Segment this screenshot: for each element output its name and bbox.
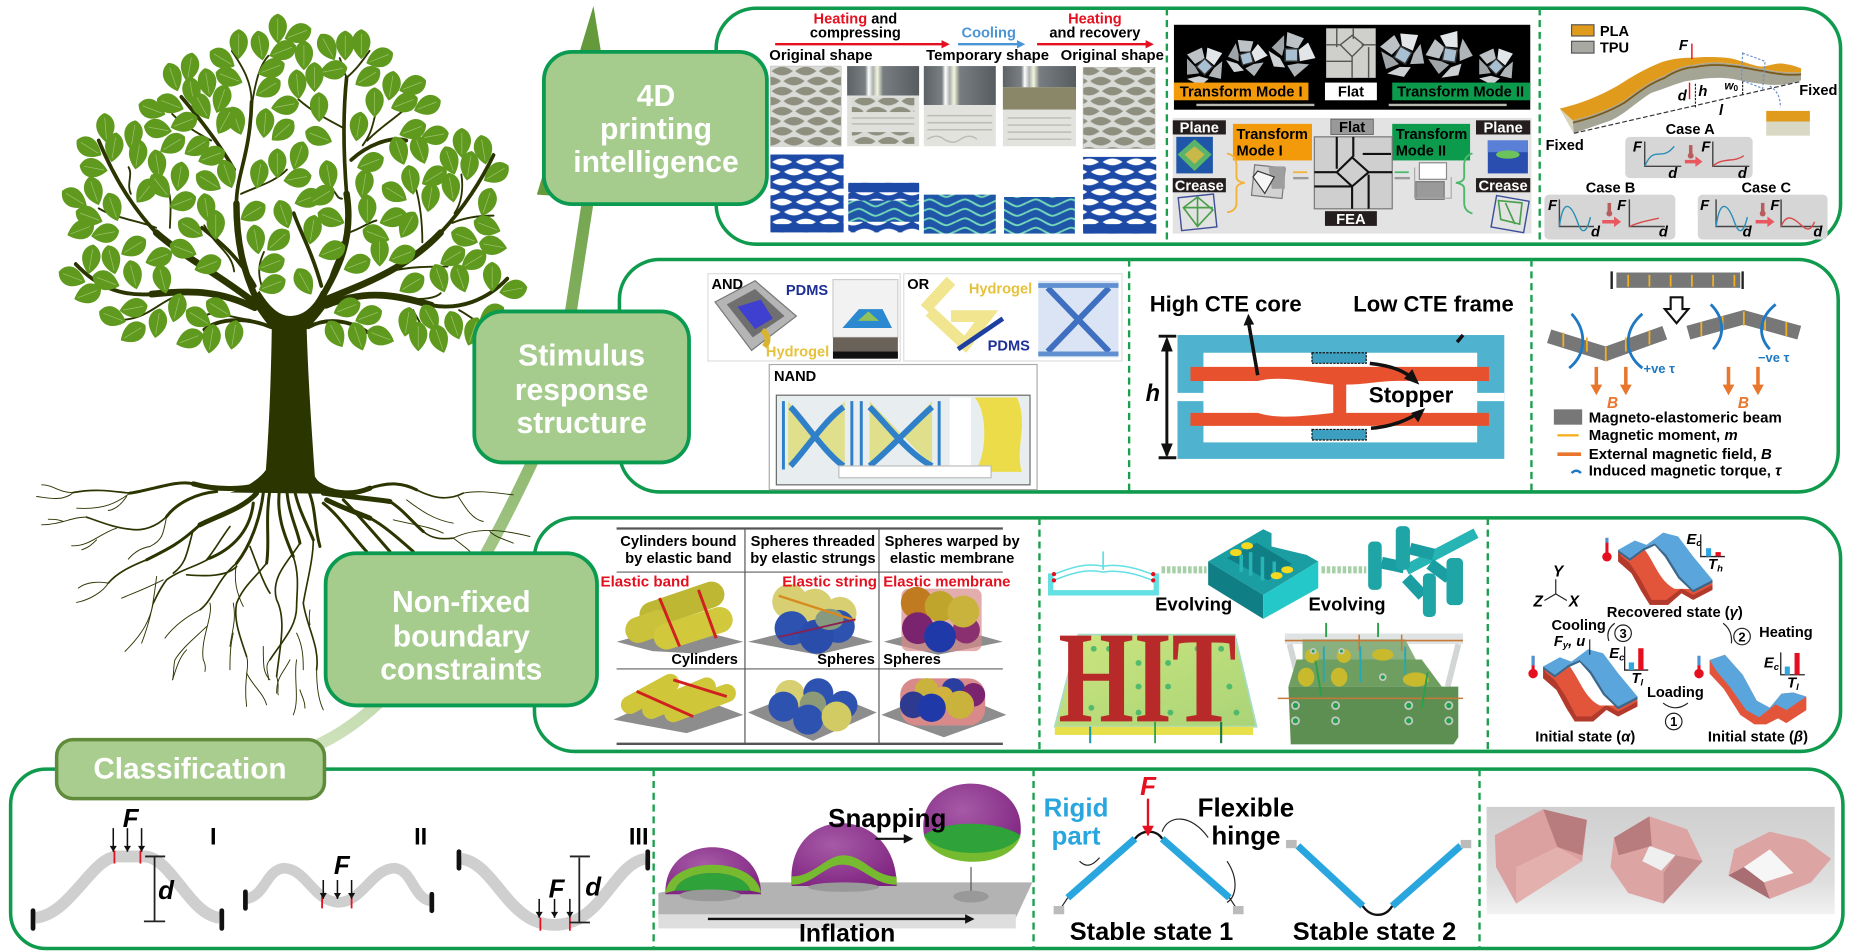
sub-panel: thermal bistable states: , u — [1567, 634, 1585, 650]
sub-panel: PLA TPU beam and force cases: w — [1724, 79, 1734, 92]
sub-panel: magneto-elastomeric beam: Induced magnetic torque, τ — [1589, 462, 1782, 479]
sub-panel: thermal bistable states: F — [1554, 634, 1563, 650]
sub-panel: magneto-elastomeric beam: Magnetic moment, m — [1589, 427, 1738, 444]
sub-panel: thermal bistable states: Initial state (α) — [1535, 730, 1635, 746]
sub-panel: rigid part and flexible hinge — [1044, 773, 1471, 946]
sub-panel: origami transform modes: Mode II — [1396, 144, 1446, 160]
sub-panel: heating and cooling lattice sequence: compressing — [810, 26, 901, 42]
sub-panel: rigid part and flexible hinge: Rigid — [1044, 794, 1108, 822]
sub-panel: AND OR NAND logic gates: Hydrogel — [766, 344, 829, 360]
category box: 4D printing intelligence — [544, 52, 767, 204]
sub-panel: AND OR NAND logic gates: Hydrogel — [969, 282, 1032, 298]
sub-panel: bistable beam types I II III: F — [549, 876, 566, 904]
sub-panel: magneto-elastomeric beam: Magneto-elastomeric beam — [1589, 409, 1782, 426]
sub-panel: bistable beam types I II III: I — [210, 824, 217, 850]
category box: stimulus response structure: Stimulus — [518, 340, 645, 373]
category box: classification — [57, 740, 324, 799]
sub-panel: PLA TPU beam and force cases: d — [1668, 166, 1678, 182]
sub-panel: thermal bistable states: Recovered state (γ) — [1607, 605, 1743, 621]
sub-panel: thermal bistable states: E — [1764, 656, 1774, 672]
sub-panel: origami transform modes — [1173, 25, 1531, 234]
sub-panel: thermal bistable states: c — [1619, 652, 1625, 663]
sub-panel: thermal bistable states: Cooling — [1551, 618, 1606, 634]
sub-panel: PLA TPU beam and force cases: d — [1738, 166, 1748, 182]
panel: 4D printing intelligence — [716, 8, 1841, 244]
growth arrow — [316, 6, 625, 746]
category box: non-fixed boundary constraints — [326, 553, 597, 705]
sub-panel: thermal bistable states: 3 — [1620, 626, 1627, 641]
sub-panel: PLA TPU beam and force cases: d — [1591, 225, 1601, 241]
sub-panel: origami transform modes: Plane — [1483, 121, 1523, 137]
tree roots — [37, 470, 530, 715]
sub-panel: pink origami structures — [1487, 807, 1835, 914]
sub-panel: PLA TPU beam and force cases: Fixed — [1546, 138, 1584, 154]
tree trunk and branches — [76, 51, 507, 477]
sub-panel: elastic bound table: Cylinders bound — [620, 534, 737, 550]
sub-panel: thermal bistable states — [1528, 532, 1813, 746]
sub-panel: PLA TPU beam and force cases: h — [1698, 84, 1707, 100]
sub-panel: elastic bound table: Cylinders — [671, 652, 738, 668]
sub-panel: origami transform modes: FEA — [1336, 212, 1366, 228]
sub-panel: AND OR NAND logic gates: NAND — [774, 369, 816, 385]
category box: stimulus response structure: response — [515, 374, 649, 407]
tree leaves — [56, 14, 529, 356]
category box: 4D printing intelligence: 4D — [637, 80, 675, 113]
sub-panel: PLA TPU beam and force cases: d — [1678, 88, 1688, 104]
sub-panel: origami transform modes: Transform Mode II — [1397, 85, 1524, 101]
sub-panel: thermal bistable states: l — [1796, 681, 1799, 692]
sub-panel: rigid part and flexible hinge: Flexible — [1198, 794, 1294, 822]
sub-panel: thermal bistable states: X — [1568, 593, 1580, 610]
sub-panel: PLA TPU beam and force cases: d — [1743, 225, 1753, 241]
sub-panel: elastic bound table: Elastic band — [601, 573, 689, 590]
sub-panel: elastic bound table: Elastic string — [782, 573, 877, 590]
panel: non-fixed boundary constraints — [534, 518, 1841, 751]
sub-panel: PLA TPU beam and force cases — [1544, 24, 1837, 241]
sub-panel: thermal bistable states: Z — [1532, 593, 1543, 610]
sub-panel: origami transform modes: Crease — [1479, 179, 1528, 195]
sub-panel: bistable beam types I II III: F — [123, 805, 140, 833]
sub-panel: elastic bound table: by elastic band — [625, 551, 732, 567]
sub-panel: thermal bistable states: h — [1717, 563, 1723, 574]
sub-panel: evolving HIT structure: Evolving — [1155, 593, 1232, 614]
sub-panel: PLA TPU beam and force cases: F — [1617, 198, 1627, 214]
category box: stimulus response structure — [474, 311, 689, 462]
sub-panel: AND OR NAND logic gates: AND — [711, 277, 743, 293]
sub-panel: thermal bistable states: Initial state (β) — [1708, 730, 1808, 746]
sub-panel: elastic bound table: Elastic membrane — [883, 574, 1010, 590]
sub-panel: thermal bistable states: c — [1696, 537, 1702, 548]
sub-panel: thermal bistable states: c — [1774, 661, 1780, 672]
tree crown — [56, 14, 529, 477]
sub-panel: PLA TPU beam and force cases: PLA — [1600, 24, 1630, 40]
sub-panel: elastic bound table: Spheres — [883, 652, 941, 668]
sub-panel: PLA TPU beam and force cases: d — [1659, 225, 1669, 241]
sub-panel: CTE core and frame: Low CTE frame — [1353, 291, 1514, 316]
sub-panel: evolving HIT structure — [1051, 526, 1476, 750]
sub-panel: PLA TPU beam and force cases: d — [1813, 225, 1823, 241]
sub-panel: thermal bistable states: 1 — [1670, 714, 1677, 729]
sub-panel: elastic bound table: elastic membrane — [890, 551, 1014, 567]
sub-panel: bistable beam types I II III: d — [585, 873, 602, 901]
sub-panel: rigid part and flexible hinge: hinge — [1211, 823, 1281, 851]
sub-panel: heating and cooling lattice sequence: Original shape — [1061, 48, 1164, 64]
sub-panel: PLA TPU beam and force cases: Fixed — [1799, 83, 1837, 99]
sub-panel: PLA TPU beam and force cases: 0 — [1734, 84, 1739, 93]
sub-panel: heating and cooling lattice sequence: Heating — [1068, 12, 1122, 28]
sub-panel: PLA TPU beam and force cases: F — [1700, 198, 1710, 214]
sub-panel: CTE core and frame — [1146, 291, 1514, 459]
category box: 4D printing intelligence: intelligence — [573, 146, 739, 179]
sub-panel: bistable beam types I II III — [33, 805, 649, 931]
sub-panel: bistable beam types I II III: d — [158, 877, 175, 905]
panel: stimulus response structure — [619, 260, 1838, 492]
sub-panel: thermal bistable states: 2 — [1738, 629, 1746, 644]
sub-panel: thermal bistable states: Y — [1553, 564, 1565, 581]
sub-panel: AND OR NAND logic gates: PDMS — [988, 338, 1030, 354]
category box: stimulus response structure: structure — [516, 407, 647, 440]
sub-panel: thermal bistable states: l — [1641, 676, 1644, 687]
sub-panel: heating and cooling lattice sequence: Original shape — [769, 48, 872, 64]
sub-panel: rigid part and flexible hinge: Stable state 1 — [1070, 918, 1233, 946]
sub-panel: heating and cooling lattice sequence: and recovery — [1049, 26, 1141, 42]
sub-panel: PLA TPU beam and force cases: F — [1701, 140, 1711, 156]
sub-panel: rigid part and flexible hinge: part — [1052, 823, 1101, 851]
sub-panel: AND OR NAND logic gates — [708, 274, 1122, 490]
sub-panel: CTE core and frame: h — [1146, 380, 1160, 406]
sub-panel: bistable beam types I II III: II — [414, 824, 427, 850]
sub-panel: rigid part and flexible hinge: F — [1140, 773, 1157, 801]
sub-panel: origami transform modes: Crease — [1175, 179, 1224, 195]
sub-panel: bistable beam types I II III: III — [629, 824, 649, 850]
sub-panel: origami transform modes: Plane — [1180, 121, 1219, 137]
sub-panel: CTE core and frame: High CTE core — [1150, 291, 1302, 316]
sub-panel: magneto-elastomeric beam: +ve τ — [1644, 361, 1675, 376]
category box: 4D printing intelligence: printing — [600, 113, 712, 146]
sub-panel: AND OR NAND logic gates: OR — [907, 277, 930, 293]
sub-panel: heating and cooling lattice sequence: Cooling — [962, 26, 1016, 42]
sub-panel: thermal bistable states: T — [1708, 557, 1717, 573]
sub-panel: heating and cooling lattice sequence: Temporary shape — [926, 48, 1049, 64]
sub-panel: evolving HIT structure: Evolving — [1308, 593, 1386, 614]
sub-panel: PLA TPU beam and force cases: Case C — [1741, 180, 1791, 196]
sub-panel: magneto-elastomeric beam: External magnetic field, B — [1589, 446, 1772, 463]
sub-panel: magneto-elastomeric beam: B — [1607, 395, 1618, 412]
sub-panel: PLA TPU beam and force cases: F — [1770, 198, 1780, 214]
sub-panel: inflation snapping dome: Inflation — [799, 920, 895, 947]
sub-panel: origami transform modes: Transform — [1236, 127, 1308, 143]
sub-panel: thermal bistable states: Loading — [1647, 685, 1704, 701]
category box: non-fixed boundary constraints: constraints — [380, 653, 542, 686]
sub-panel: elastic bound table — [601, 528, 1020, 744]
sub-panel: elastic bound table: by elastic strungs — [750, 551, 876, 567]
sub-panel: inflation snapping dome — [658, 784, 1032, 947]
category box: classification: Classification — [93, 753, 287, 786]
sub-panel: PLA TPU beam and force cases: Case A — [1666, 122, 1715, 138]
sub-panel: inflation snapping dome: Snapping — [828, 805, 946, 833]
panel: classification examples — [11, 769, 1843, 948]
sub-panel: origami transform modes: Flat — [1339, 120, 1365, 136]
category box: non-fixed boundary constraints: boundary — [393, 620, 530, 653]
sub-panel: PLA TPU beam and force cases: l — [1719, 103, 1724, 119]
sub-panel: heating and cooling lattice sequence — [769, 12, 1164, 234]
sub-panel: thermal bistable states: T — [1631, 671, 1641, 687]
sub-panel: magneto-elastomeric beam — [1549, 271, 1799, 479]
sub-panel: magneto-elastomeric beam: −ve τ — [1758, 350, 1790, 365]
sub-panel: CTE core and frame: Stopper — [1369, 382, 1454, 407]
sub-panel: PLA TPU beam and force cases: F — [1548, 198, 1558, 214]
sub-panel: PLA TPU beam and force cases: F — [1633, 140, 1643, 156]
sub-panel: PLA TPU beam and force cases: F — [1679, 38, 1689, 54]
sub-panel: thermal bistable states: T — [1787, 676, 1796, 692]
sub-panel: elastic bound table: Spheres — [817, 652, 875, 668]
category box: non-fixed boundary constraints: Non-fixed — [392, 586, 531, 619]
sub-panel: PLA TPU beam and force cases: TPU — [1600, 41, 1629, 57]
sub-panel: thermal bistable states: E — [1609, 646, 1619, 662]
sub-panel: thermal bistable states: Heating — [1759, 625, 1813, 641]
sub-panel: bistable beam types I II III: F — [334, 852, 351, 880]
sub-panel: origami transform modes: Transform Mode I — [1180, 85, 1303, 101]
sub-panel: origami transform modes: Flat — [1338, 85, 1364, 101]
sub-panel: thermal bistable states: E — [1686, 532, 1696, 548]
sub-panel: AND OR NAND logic gates: PDMS — [786, 283, 828, 299]
sub-panel: PLA TPU beam and force cases: Case B — [1586, 180, 1635, 196]
sub-panel: evolving HIT structure: HIT — [1058, 605, 1236, 750]
sub-panel: rigid part and flexible hinge: Stable state 2 — [1293, 918, 1456, 946]
sub-panel: origami transform modes: Mode I — [1236, 144, 1283, 160]
sub-panel: magneto-elastomeric beam: B — [1738, 395, 1749, 412]
sub-panel: elastic bound table: Spheres warped by — [885, 534, 1020, 550]
sub-panel: thermal bistable states: y — [1562, 639, 1569, 650]
sub-panel: heating and cooling lattice sequence: Heating and — [814, 12, 897, 28]
sub-panel: origami transform modes: Transform — [1396, 127, 1467, 143]
sub-panel: elastic bound table: Spheres threaded — [751, 534, 875, 550]
